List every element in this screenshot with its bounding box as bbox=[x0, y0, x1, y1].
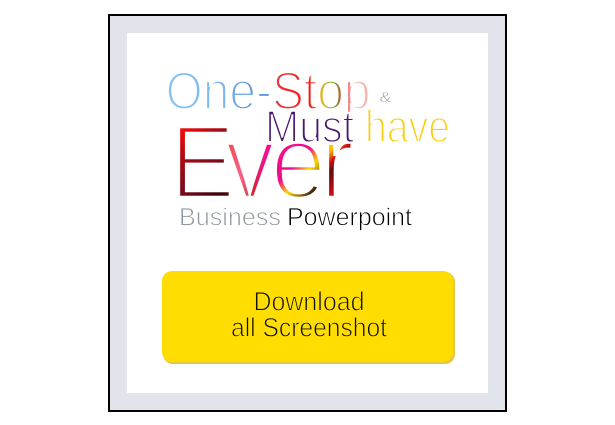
outer frame panel bbox=[109, 15, 506, 411]
large heading: Ever: r bbox=[320, 104, 354, 221]
large heading: Ever: E bbox=[170, 104, 235, 221]
large heading: Ever bbox=[170, 104, 354, 221]
button face bbox=[162, 271, 453, 362]
heading line: One-Stop: One-Stop bbox=[166, 62, 370, 121]
button label: Download bbox=[254, 286, 364, 316]
title block bbox=[166, 62, 450, 232]
button shadow bbox=[163, 272, 455, 364]
download button bbox=[162, 271, 455, 364]
button label: all Screenshot bbox=[231, 312, 387, 342]
button label bbox=[231, 286, 387, 342]
ampersand: & bbox=[380, 89, 392, 106]
subtitle word: Powerpoint: Powerpoint bbox=[287, 204, 412, 232]
large heading: Ever: e bbox=[270, 104, 326, 221]
large heading: Ever: v bbox=[225, 104, 275, 221]
white inner panel bbox=[127, 33, 488, 393]
subtitle word: Business: Business bbox=[179, 204, 281, 232]
heading word: Must: Must bbox=[265, 101, 354, 152]
heading word: have: have bbox=[365, 101, 450, 152]
